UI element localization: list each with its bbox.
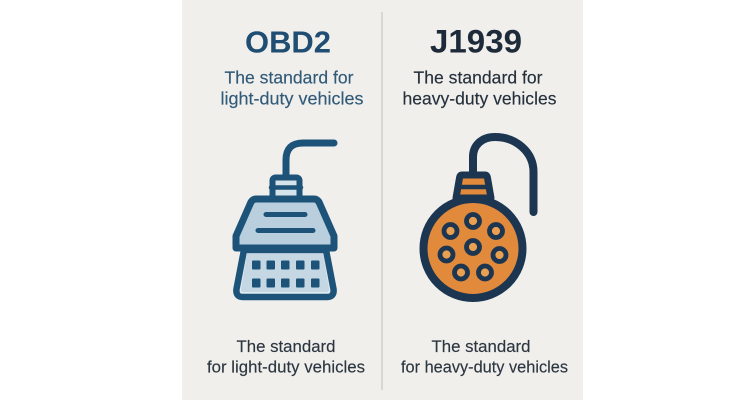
heading: J1939: J1939: [430, 24, 522, 60]
subtitle: light-duty: light-duty vehicles: [220, 88, 364, 108]
body lines: [258, 214, 313, 230]
caption: light-duty: The standard: [236, 337, 336, 356]
icon: OBD2 connector: [236, 143, 334, 297]
subtitle: heavy-duty: heavy-duty vehicles: [402, 88, 557, 108]
caption: light-duty: for light-duty vehicles: [207, 358, 365, 376]
subtitle: light-duty: The standard for: [224, 68, 354, 88]
subtitle: heavy-duty: The standard for: [414, 68, 543, 88]
caption: heavy-duty: The standard: [432, 337, 530, 356]
round body: [424, 199, 522, 298]
caption: heavy-duty: for heavy-duty vehicles: [401, 358, 568, 376]
pin sockets: [440, 214, 506, 279]
background panel: [182, 0, 583, 400]
lower pin block: [236, 250, 334, 297]
caption: heavy-duty: [401, 337, 568, 376]
upper body: [236, 199, 334, 248]
neck: [456, 175, 491, 198]
subtitle: heavy-duty: [402, 68, 557, 108]
cable: [473, 137, 534, 212]
neck: [272, 178, 300, 200]
subtitle: light-duty: [220, 68, 364, 108]
heading: OBD2: OBD2: [245, 24, 331, 60]
caption: light-duty: [207, 337, 365, 376]
pins: [252, 260, 320, 288]
icon: J1939 connector: [424, 137, 534, 298]
cable: [286, 143, 334, 177]
